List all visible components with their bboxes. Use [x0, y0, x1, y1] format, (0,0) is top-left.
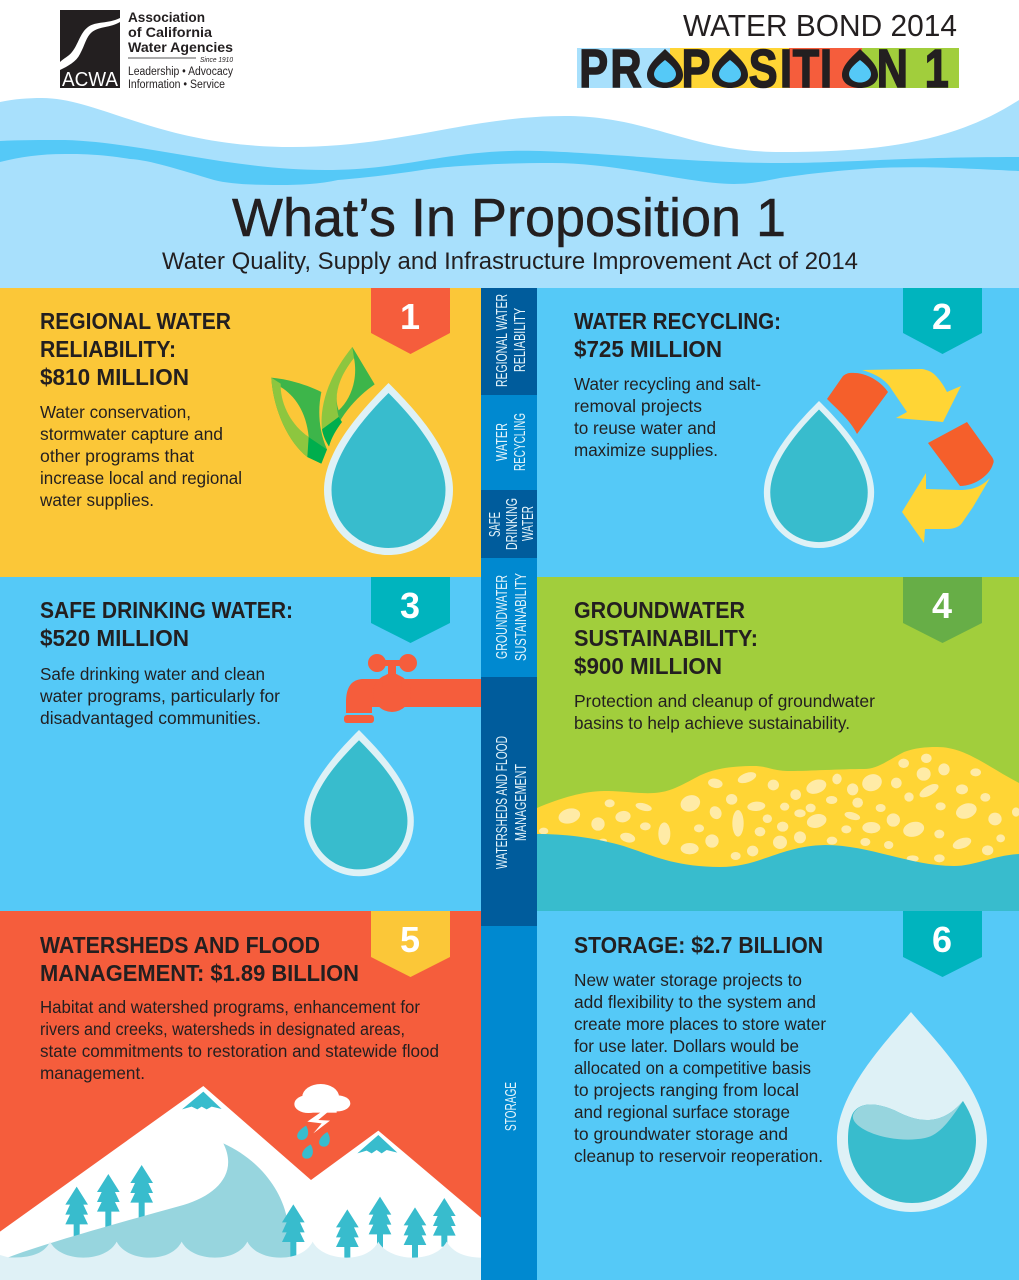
logo wordmark: Since 1910	[200, 57, 233, 64]
panel 5: watersheds and flood management	[0, 911, 482, 1280]
icon: storm cloud	[294, 1084, 350, 1159]
heading: $810 MILLION	[40, 364, 189, 390]
title: What’s In Proposition 1	[232, 188, 786, 248]
body text: management.	[40, 1063, 145, 1083]
logo wordmark	[128, 9, 233, 91]
header waves	[0, 98, 1019, 288]
body text: add flexibility to the system and	[574, 992, 816, 1012]
icon: drop letter O	[647, 49, 683, 88]
body text	[574, 970, 826, 1166]
panel 4: groundwater sustainability	[537, 577, 1019, 911]
body text	[574, 691, 875, 733]
body text: rivers and creeks, watersheds in designated areas,	[40, 1019, 405, 1039]
heading: $725 MILLION	[574, 336, 722, 362]
body text: create more places to store water	[574, 1014, 826, 1034]
heading	[574, 308, 781, 362]
body text: state commitments to restoration and statewide flood	[40, 1041, 439, 1061]
heading: SAFE DRINKING WATER:	[40, 597, 293, 623]
logo wordmark: Information • Service	[128, 79, 225, 91]
badge 3: 3	[400, 585, 420, 626]
body text: and regional surface storage	[574, 1102, 790, 1122]
strip: water recycling	[481, 395, 537, 490]
strip: regional water reliability: REGIONAL WATER	[494, 294, 511, 387]
panel 1: regional water reliability	[0, 288, 481, 577]
body text: allocated on a competitive basis	[574, 1058, 811, 1078]
heading	[574, 597, 758, 679]
badge 5: 5	[400, 919, 420, 960]
strip: safe drinking water: WATER	[520, 506, 537, 541]
center navigation strip	[481, 288, 537, 1280]
badge 6	[903, 911, 982, 977]
body text: removal projects	[574, 396, 702, 416]
icon: drop letter O	[842, 49, 878, 88]
body text: other programs that	[40, 446, 194, 466]
strip: water recycling: WATER	[494, 423, 511, 461]
body text: basins to help achieve sustainability.	[574, 713, 850, 733]
body text	[39, 664, 280, 728]
icon: water drop	[324, 383, 453, 555]
body text: Safe drinking water and clean	[40, 664, 265, 684]
badge 4	[903, 577, 982, 643]
heading: WATER RECYCLING:	[574, 308, 781, 334]
badge 3	[371, 577, 450, 643]
body text: water supplies.	[39, 490, 154, 510]
logo mark	[60, 10, 120, 91]
strip: storage: STORAGE	[503, 1082, 520, 1131]
strip: groundwater sustainability: GROUNDWATER	[494, 575, 511, 659]
badge 4: 4	[932, 585, 952, 626]
logo mark: ACWA	[62, 69, 119, 91]
strip: watersheds and flood management	[481, 677, 537, 926]
badge 5	[371, 911, 450, 977]
strip: safe drinking water	[481, 490, 537, 558]
strip: regional water reliability	[481, 288, 537, 395]
heading: GROUNDWATER	[574, 597, 745, 623]
logo wordmark: Water Agencies	[128, 39, 233, 55]
logo wordmark: Leadership • Advocacy	[128, 66, 233, 78]
panel 6: storage	[537, 911, 1019, 1280]
badge 2	[903, 288, 982, 354]
body text: to groundwater storage and	[574, 1124, 788, 1144]
body text	[574, 374, 761, 460]
heading: MANAGEMENT: $1.89 BILLION	[40, 960, 359, 986]
body text: Protection and cleanup of groundwater	[574, 691, 875, 711]
icon: leaves	[271, 347, 375, 464]
heading: SUSTAINABILITY:	[574, 625, 758, 651]
heading: RELIABILITY:	[40, 336, 176, 362]
heading	[40, 308, 231, 390]
body text: New water storage projects to	[574, 970, 802, 990]
strip: storage	[481, 926, 537, 1280]
body text: to reuse water and	[574, 418, 716, 438]
heading	[40, 597, 293, 651]
icon: water drop	[764, 401, 874, 548]
badge 6: 6	[932, 919, 952, 960]
icon: storage drop	[837, 1012, 987, 1212]
badge 2: 2	[932, 296, 952, 337]
subtitle: Water Quality, Supply and Infrastructure Improvement Act of 2014	[162, 248, 858, 275]
body text: water programs, particularly for	[39, 686, 280, 706]
strip: water recycling: RECYCLING	[512, 413, 529, 471]
strip: groundwater sustainability	[481, 558, 537, 677]
badge 1	[371, 288, 450, 354]
Proposition 1 banner: PROPOSITION 1	[579, 40, 949, 99]
icon: faucet	[344, 654, 481, 723]
heading: STORAGE: $2.7 BILLION	[574, 932, 823, 958]
body text: stormwater capture and	[40, 424, 223, 444]
strip: safe drinking water: DRINKING	[504, 498, 521, 550]
Water Bond 2014 heading: WATER BOND 2014	[683, 8, 957, 43]
strip: safe drinking water: SAFE	[487, 512, 504, 537]
body text: Habitat and watershed programs, enhancement for	[40, 997, 420, 1017]
strip: regional water reliability: RELIABILITY	[512, 308, 529, 372]
strip: groundwater sustainability: SUSTAINABILITY	[513, 573, 530, 661]
body text: Water recycling and salt-	[574, 374, 761, 394]
body text: Water conservation,	[40, 402, 191, 422]
body text: increase local and regional	[40, 468, 242, 488]
body text: maximize supplies.	[574, 440, 718, 460]
panel 3: safe drinking water	[0, 577, 481, 911]
heading: $520 MILLION	[40, 625, 189, 651]
panel 2: water recycling	[537, 288, 1019, 577]
body text: disadvantaged communities.	[40, 708, 261, 728]
body text	[39, 402, 242, 510]
illustration: gravel layer	[537, 747, 1019, 911]
heading	[40, 932, 359, 986]
badge 1: 1	[400, 296, 420, 337]
strip: watersheds and flood management: WATERSHEDS AND FLOOD	[494, 736, 511, 869]
icon: drop letter O	[712, 49, 748, 88]
illustration: mountains, trees and flood wave	[0, 1084, 482, 1280]
heading: REGIONAL WATER	[40, 308, 231, 334]
heading: WATERSHEDS AND FLOOD	[40, 932, 320, 958]
ACWA logo	[60, 9, 233, 91]
heading: $900 MILLION	[574, 653, 722, 679]
body text: for use later. Dollars would be	[574, 1036, 799, 1056]
logo wordmark: of California	[128, 24, 212, 40]
strip: watersheds and flood management: MANAGEMENT	[513, 764, 530, 841]
body text: to projects ranging from local	[574, 1080, 799, 1100]
body text	[40, 997, 439, 1083]
body text: cleanup to reservoir reoperation.	[574, 1146, 823, 1166]
icon: recycling arrows	[827, 369, 994, 543]
logo wordmark: Association	[128, 9, 205, 25]
icon: water drop	[304, 730, 414, 876]
